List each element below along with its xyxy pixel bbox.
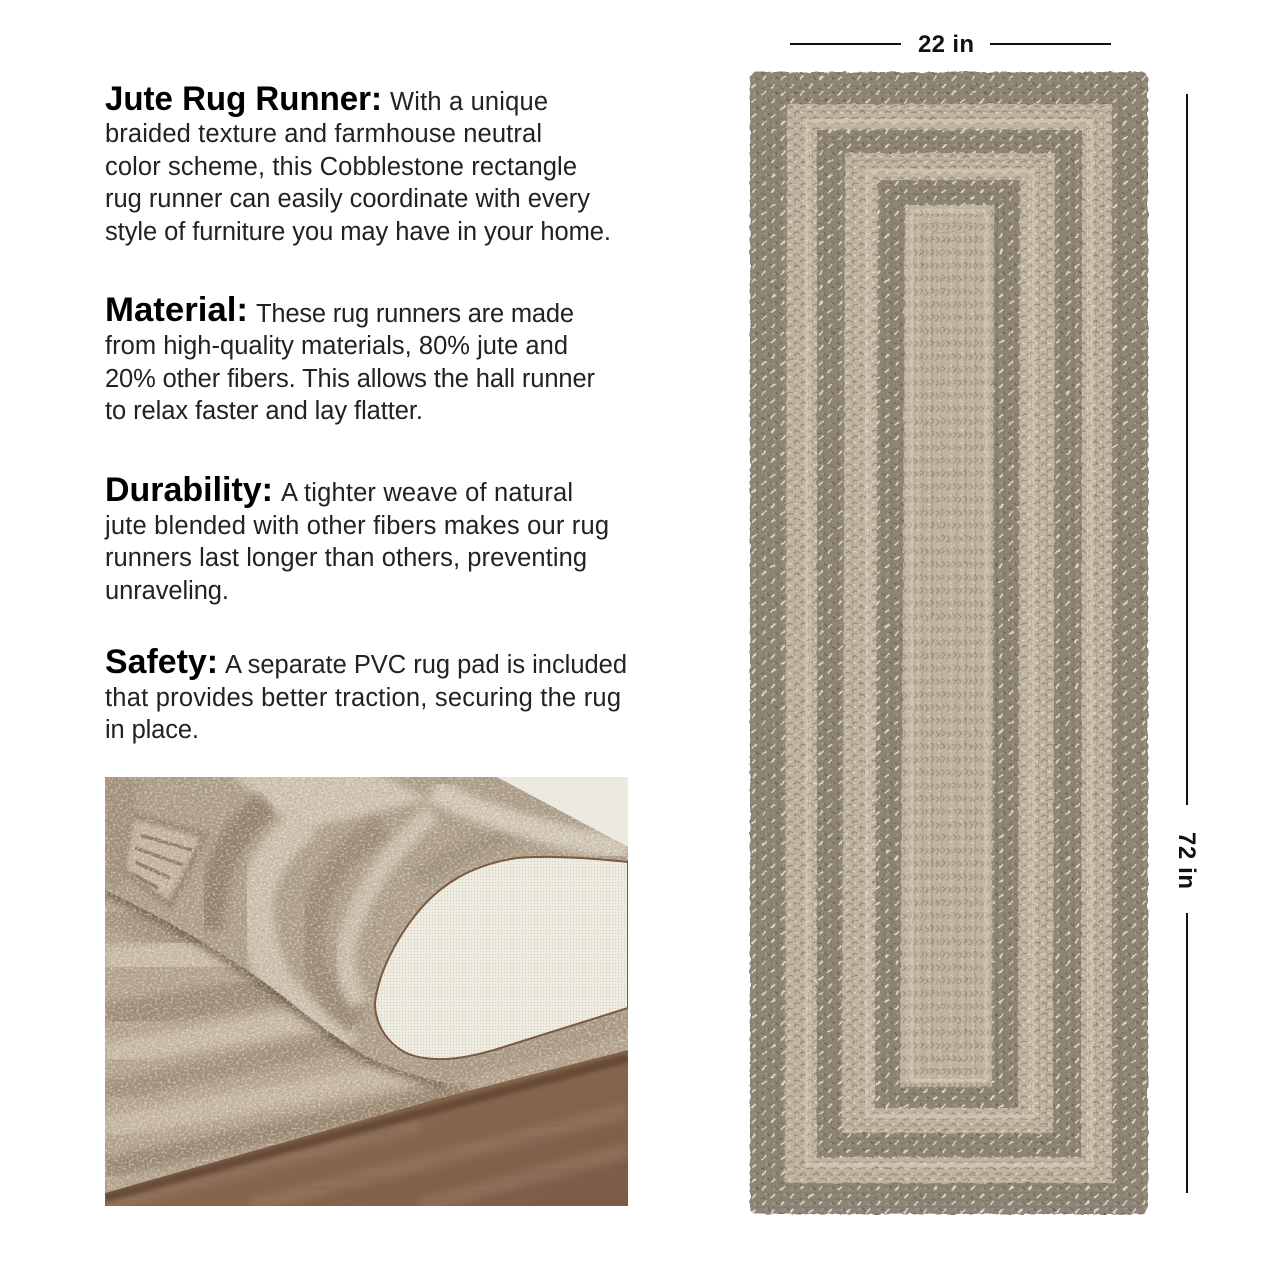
text block: Safety: A separate PVC rug pad is included	[225, 651, 627, 679]
heading block: Jute Rug Runner: With a unique	[390, 88, 548, 116]
rug top-down view	[750, 72, 1148, 1214]
photo: folded rug corner showing non-slip backing	[105, 770, 628, 1206]
text block: Material: 20% other fibers. This allows the hall runner	[105, 365, 596, 393]
text block: Safety: that provides better traction, securing the rug	[105, 684, 621, 712]
text block: Material: Material:	[105, 291, 248, 329]
text block: Durability: Durability:	[105, 471, 273, 509]
heading block: Jute Rug Runner: Jute Rug Runner:	[105, 80, 382, 118]
heading block: Jute Rug Runner: style of furniture you may have in your home.	[105, 218, 611, 246]
wood floor	[105, 1045, 628, 1206]
text block: Safety: Safety:	[105, 643, 218, 681]
text block: Safety	[105, 643, 627, 744]
text block: Material: from high-quality materials, 80% jute and	[105, 332, 568, 360]
text block: Material: These rug runners are made	[256, 300, 574, 328]
text block: Durability: A tighter weave of natural	[281, 479, 573, 507]
dimension: length 72 in: 72 in	[1173, 832, 1200, 889]
flat rug section	[105, 870, 628, 1200]
text block: Safety: in place.	[105, 716, 199, 744]
rolled rug section	[105, 770, 628, 1097]
text block: Durability	[104, 471, 609, 605]
text block: Material: to relax faster and lay flatter.	[105, 397, 423, 425]
heading block: Jute Rug Runner: color scheme, this Cobblestone rectangle	[105, 153, 577, 181]
text block: Durability: unraveling.	[105, 577, 229, 605]
dimension: width 22 in: 22 in	[918, 31, 974, 58]
heading block: Jute Rug Runner: braided texture and farmhouse neutral	[105, 120, 542, 148]
heading block: Jute Rug Runner: rug runner can easily coordinate with every	[105, 185, 590, 213]
text block: Durability: jute blended with other fibers makes our rug	[104, 512, 609, 540]
heading block: Jute Rug Runner	[105, 80, 611, 246]
text block: Material	[105, 291, 596, 425]
rug backing	[375, 857, 628, 1059]
text block: Durability: runners last longer than others, preventing	[105, 544, 587, 572]
